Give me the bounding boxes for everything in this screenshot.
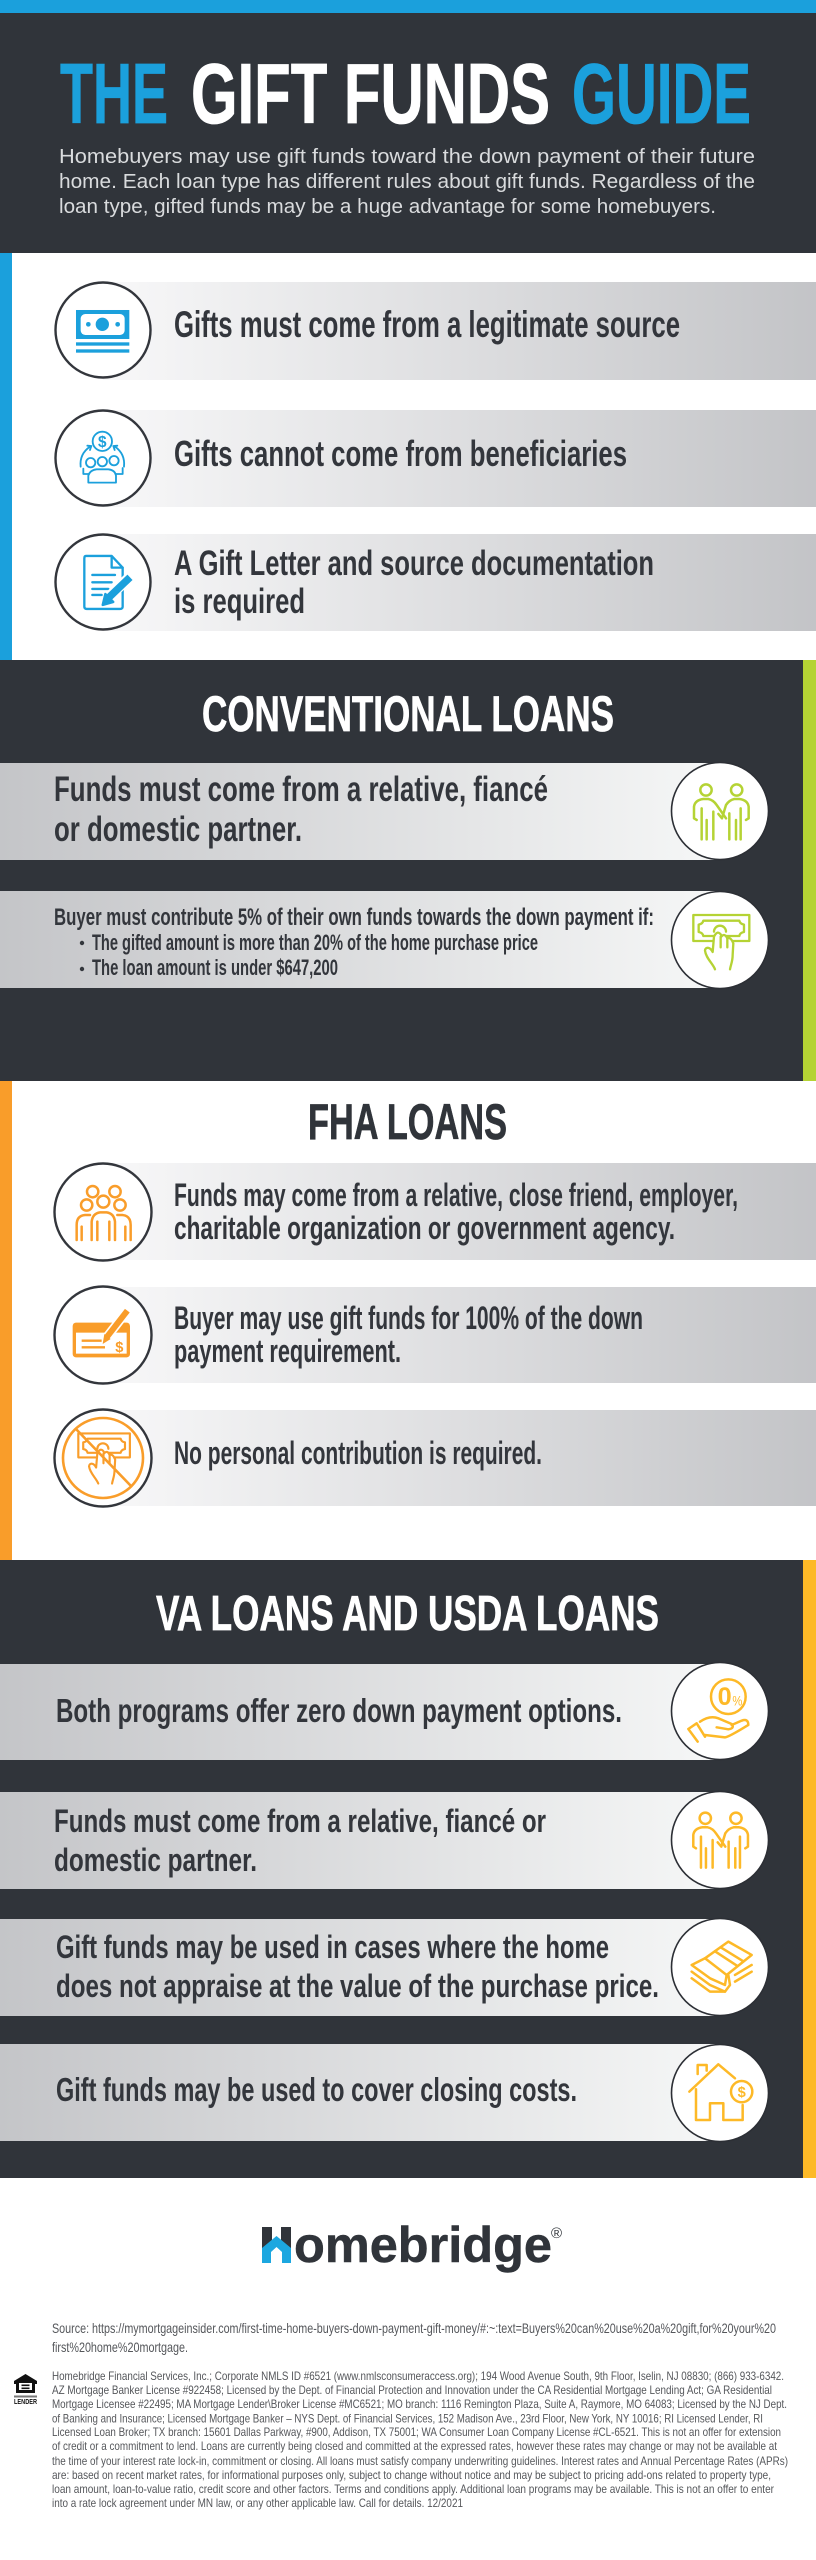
item: no contribution: [54, 1410, 816, 1506]
icon: handshake: [693, 1813, 748, 1868]
logo: Homebridge: ®: [551, 2225, 562, 2242]
item: no contribution: No personal contribution is required.: [174, 1435, 542, 1471]
title: THE: [60, 47, 168, 142]
item: funds source: [0, 1792, 768, 1889]
icon: hand on money: [693, 915, 749, 969]
icon: stack of money: [692, 1942, 752, 1992]
item: appraisal: [0, 1918, 768, 2016]
item: closing costs: Gift funds may be used to cover closing costs.: [56, 2071, 577, 2108]
rule: beneficiaries: Gifts cannot come from beneficiaries: [174, 433, 627, 474]
item: funds source: Funds must come from a relative, fiancé or: [54, 1803, 546, 1839]
source note: first%20home%20mortgage.: [52, 2339, 188, 2355]
intro paragraph: Homebuyers may use gift funds toward the down payment of their future: [59, 146, 755, 168]
icon: hand with zero percent coin: [688, 1679, 748, 1742]
intro paragraph: [59, 146, 755, 218]
icon: check and pencil: $: [115, 1340, 123, 1356]
icon: check and pencil: [73, 1311, 130, 1357]
panel: general gift rules: [0, 253, 816, 660]
item: funds source: [0, 762, 768, 860]
rule: gift letter: A Gift Letter and source documentation: [174, 544, 654, 583]
source note: [52, 2320, 776, 2355]
intro paragraph: loan type, gifted funds may be a huge advantage for some homebuyers.: [59, 196, 716, 218]
item: funds source: or domestic partner.: [54, 810, 302, 849]
item: buyer contribution: The gifted amount is more than 20% of the home purchase price: [92, 930, 538, 955]
header panel: [0, 0, 816, 253]
legal disclosure text: [52, 2369, 788, 2510]
panel: conventional loans: [0, 660, 816, 1081]
icon: house with dollar: $: [738, 2085, 746, 2101]
item: zero down: Both programs offer zero down payment options.: [56, 1692, 622, 1729]
icon: no money: [63, 1418, 143, 1498]
heading: FHA LOANS: [308, 1094, 507, 1150]
item: funds source: [54, 1163, 816, 1260]
item: buyer contribution: [0, 891, 768, 988]
icon: group and dollar: $: [98, 434, 107, 451]
item: funds source: Funds must come from a relative, fiancé: [54, 770, 548, 809]
icon: equal housing lender: LENDER: [14, 2399, 37, 2406]
item: down payment: [54, 1286, 816, 1384]
icon: people group: [77, 1186, 131, 1240]
item: buyer contribution: The loan amount is under $647,200: [92, 955, 338, 980]
icon: group and dollar: [81, 432, 124, 483]
heading: CONVENTIONAL LOANS: [202, 686, 614, 742]
icon: house with dollar: [689, 2064, 752, 2120]
intro paragraph: home. Each loan type has different rules about gift funds. Regardless of the: [59, 171, 755, 193]
item: appraisal: Gift funds may be used in cases where the home: [56, 1929, 609, 1965]
icon: hand with zero percent coin: %: [732, 1692, 742, 1708]
rule: gift letter: is required: [174, 582, 305, 621]
logo: Homebridge: omebridge: [294, 2217, 552, 2273]
panel: FHA loans: [0, 1081, 816, 1560]
rule: legitimate source: [56, 282, 816, 380]
legal disclosure text: into a rate lock agreement under MN law, or any other applicable law. Call for details. 12/2021: [52, 2496, 463, 2510]
rule: gift letter: [56, 534, 816, 631]
icon: document and pencil: [84, 556, 130, 609]
item: zero down: [0, 1662, 768, 1760]
item: funds source: domestic partner.: [54, 1842, 257, 1878]
icon: handshake: [694, 784, 749, 839]
rule: beneficiaries: [56, 410, 816, 507]
icon: equal housing lender: [14, 2374, 37, 2406]
item: closing costs: [0, 2044, 768, 2142]
icon: cash: [76, 310, 129, 353]
panel: VA and USDA loans: [0, 1560, 816, 2178]
item: down payment: payment requirement.: [174, 1333, 401, 1369]
icon: hand with zero percent coin: 0: [718, 1683, 732, 1711]
title: GIFT FUNDS: [191, 47, 550, 142]
